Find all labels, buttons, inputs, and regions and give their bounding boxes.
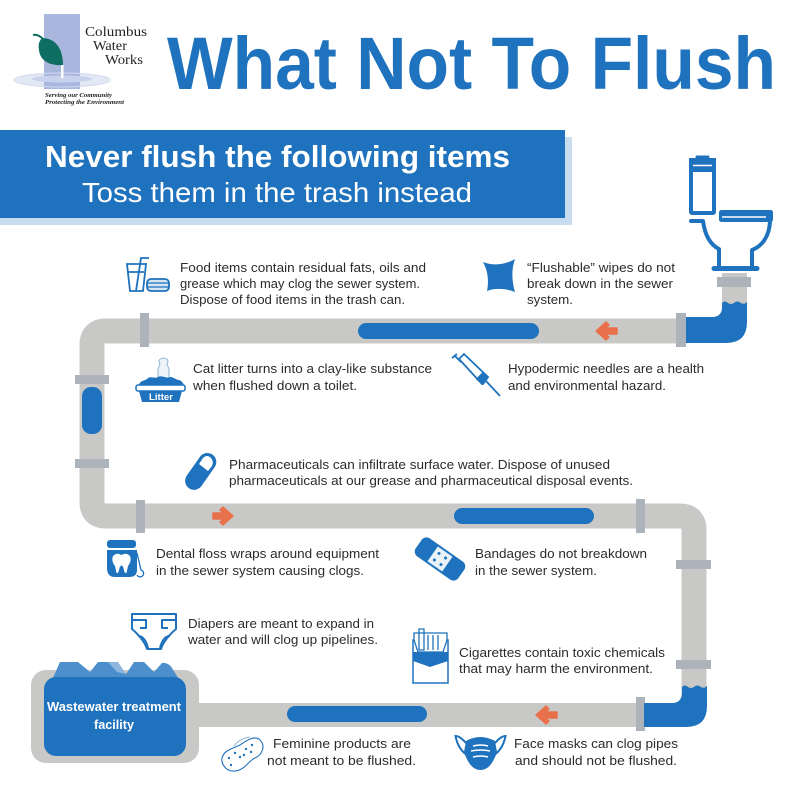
item: diapers: Diapers are meant to expand in — [188, 616, 374, 631]
item: food: Dispose of food items in the trash can. — [180, 292, 405, 307]
item: food: grease which may clog the sewer system. — [180, 276, 420, 291]
logo: Columbus Water Works: Water — [93, 38, 128, 53]
item: food: Food items contain residual fats, oils and — [180, 260, 426, 275]
item: needles: Hypodermic needles are a health — [508, 361, 704, 376]
logo: Columbus Water Works: Works — [105, 52, 143, 67]
item: cat litter: when flushed down a toilet. — [192, 378, 357, 393]
item: bandages: in the sewer system. — [475, 563, 597, 578]
item: diapers — [132, 614, 378, 649]
water in pipe, bottom elbow — [644, 686, 707, 727]
item: pharmaceuticals: pharmaceuticals at our grease and pharmaceutical disposal events. — [229, 473, 633, 488]
icon: capsule pill — [182, 449, 220, 493]
icon: diaper — [132, 614, 176, 649]
icon: bandage — [412, 535, 468, 583]
pipeline — [75, 273, 751, 731]
item: needles: and environmental hazard. — [508, 378, 666, 393]
flow arrows — [213, 322, 617, 724]
pipe flanges — [75, 277, 751, 731]
logo: Columbus Water Works: Serving our Community — [45, 93, 112, 99]
icon: wipe — [483, 259, 515, 292]
item: face masks: and should not be flushed. — [515, 753, 677, 768]
logo: Columbus Water Works — [14, 14, 147, 106]
banner: Toss them in the trash instead — [82, 177, 472, 208]
item: pharmaceuticals — [182, 449, 633, 493]
item: dental floss: in the sewer system causing clogs. — [156, 563, 364, 578]
icon: feminine pad — [222, 737, 263, 771]
icon: cigarette pack — [413, 629, 448, 683]
item: wipes — [483, 259, 675, 307]
item: wipes: break down in the sewer — [527, 276, 674, 291]
item: pharmaceuticals: Pharmaceuticals can infiltrate surface water. Dispose of unused — [229, 457, 610, 472]
water capsules — [82, 323, 594, 722]
icon: syringe — [452, 354, 500, 396]
item: feminine products: Feminine products are — [273, 736, 411, 751]
item: cigarettes — [413, 629, 666, 683]
item: feminine products — [222, 736, 416, 771]
title: What Not To Flush — [167, 22, 776, 105]
logo: Columbus Water Works: Columbus — [85, 24, 147, 39]
item: wipes: “Flushable” wipes do not — [527, 260, 675, 275]
banner: Never flush the following items — [45, 139, 510, 174]
item: bandages — [412, 535, 647, 583]
water in pipe, top elbow — [686, 302, 747, 343]
item: bandages: Bandages do not breakdown — [475, 546, 647, 561]
item: face masks: Face masks can clog pipes — [514, 736, 679, 751]
item: dental floss: Dental floss wraps around equipment — [156, 546, 379, 561]
item: cigarettes: that may harm the environment. — [459, 661, 653, 676]
item: cat litter — [136, 358, 432, 402]
wastewater treatment facility: Wastewater treatment — [47, 699, 182, 714]
wastewater treatment facility: facility — [94, 717, 135, 732]
icon: food and drink — [127, 258, 169, 291]
icon: toilet — [689, 157, 772, 268]
icon: face mask — [456, 736, 506, 770]
wastewater treatment facility — [31, 662, 199, 763]
item: cat litter: Cat litter turns into a clay-like substance — [193, 361, 432, 376]
item: dental floss — [107, 540, 379, 578]
item: needles — [452, 354, 704, 396]
icon: litter box: Litter — [149, 392, 174, 402]
item: wipes: system. — [527, 292, 573, 307]
banner — [0, 130, 572, 225]
logo: Columbus Water Works: Protecting the Environment — [45, 100, 124, 106]
item: diapers: water and will clog up pipelines. — [187, 632, 378, 647]
icon: litter box — [136, 358, 185, 402]
item: food — [127, 258, 426, 307]
item: cigarettes: Cigarettes contain toxic chemicals — [459, 645, 666, 660]
item: face masks — [456, 736, 679, 770]
icon: floss box — [107, 540, 144, 577]
item: feminine products: not meant to be flushed. — [267, 753, 416, 768]
